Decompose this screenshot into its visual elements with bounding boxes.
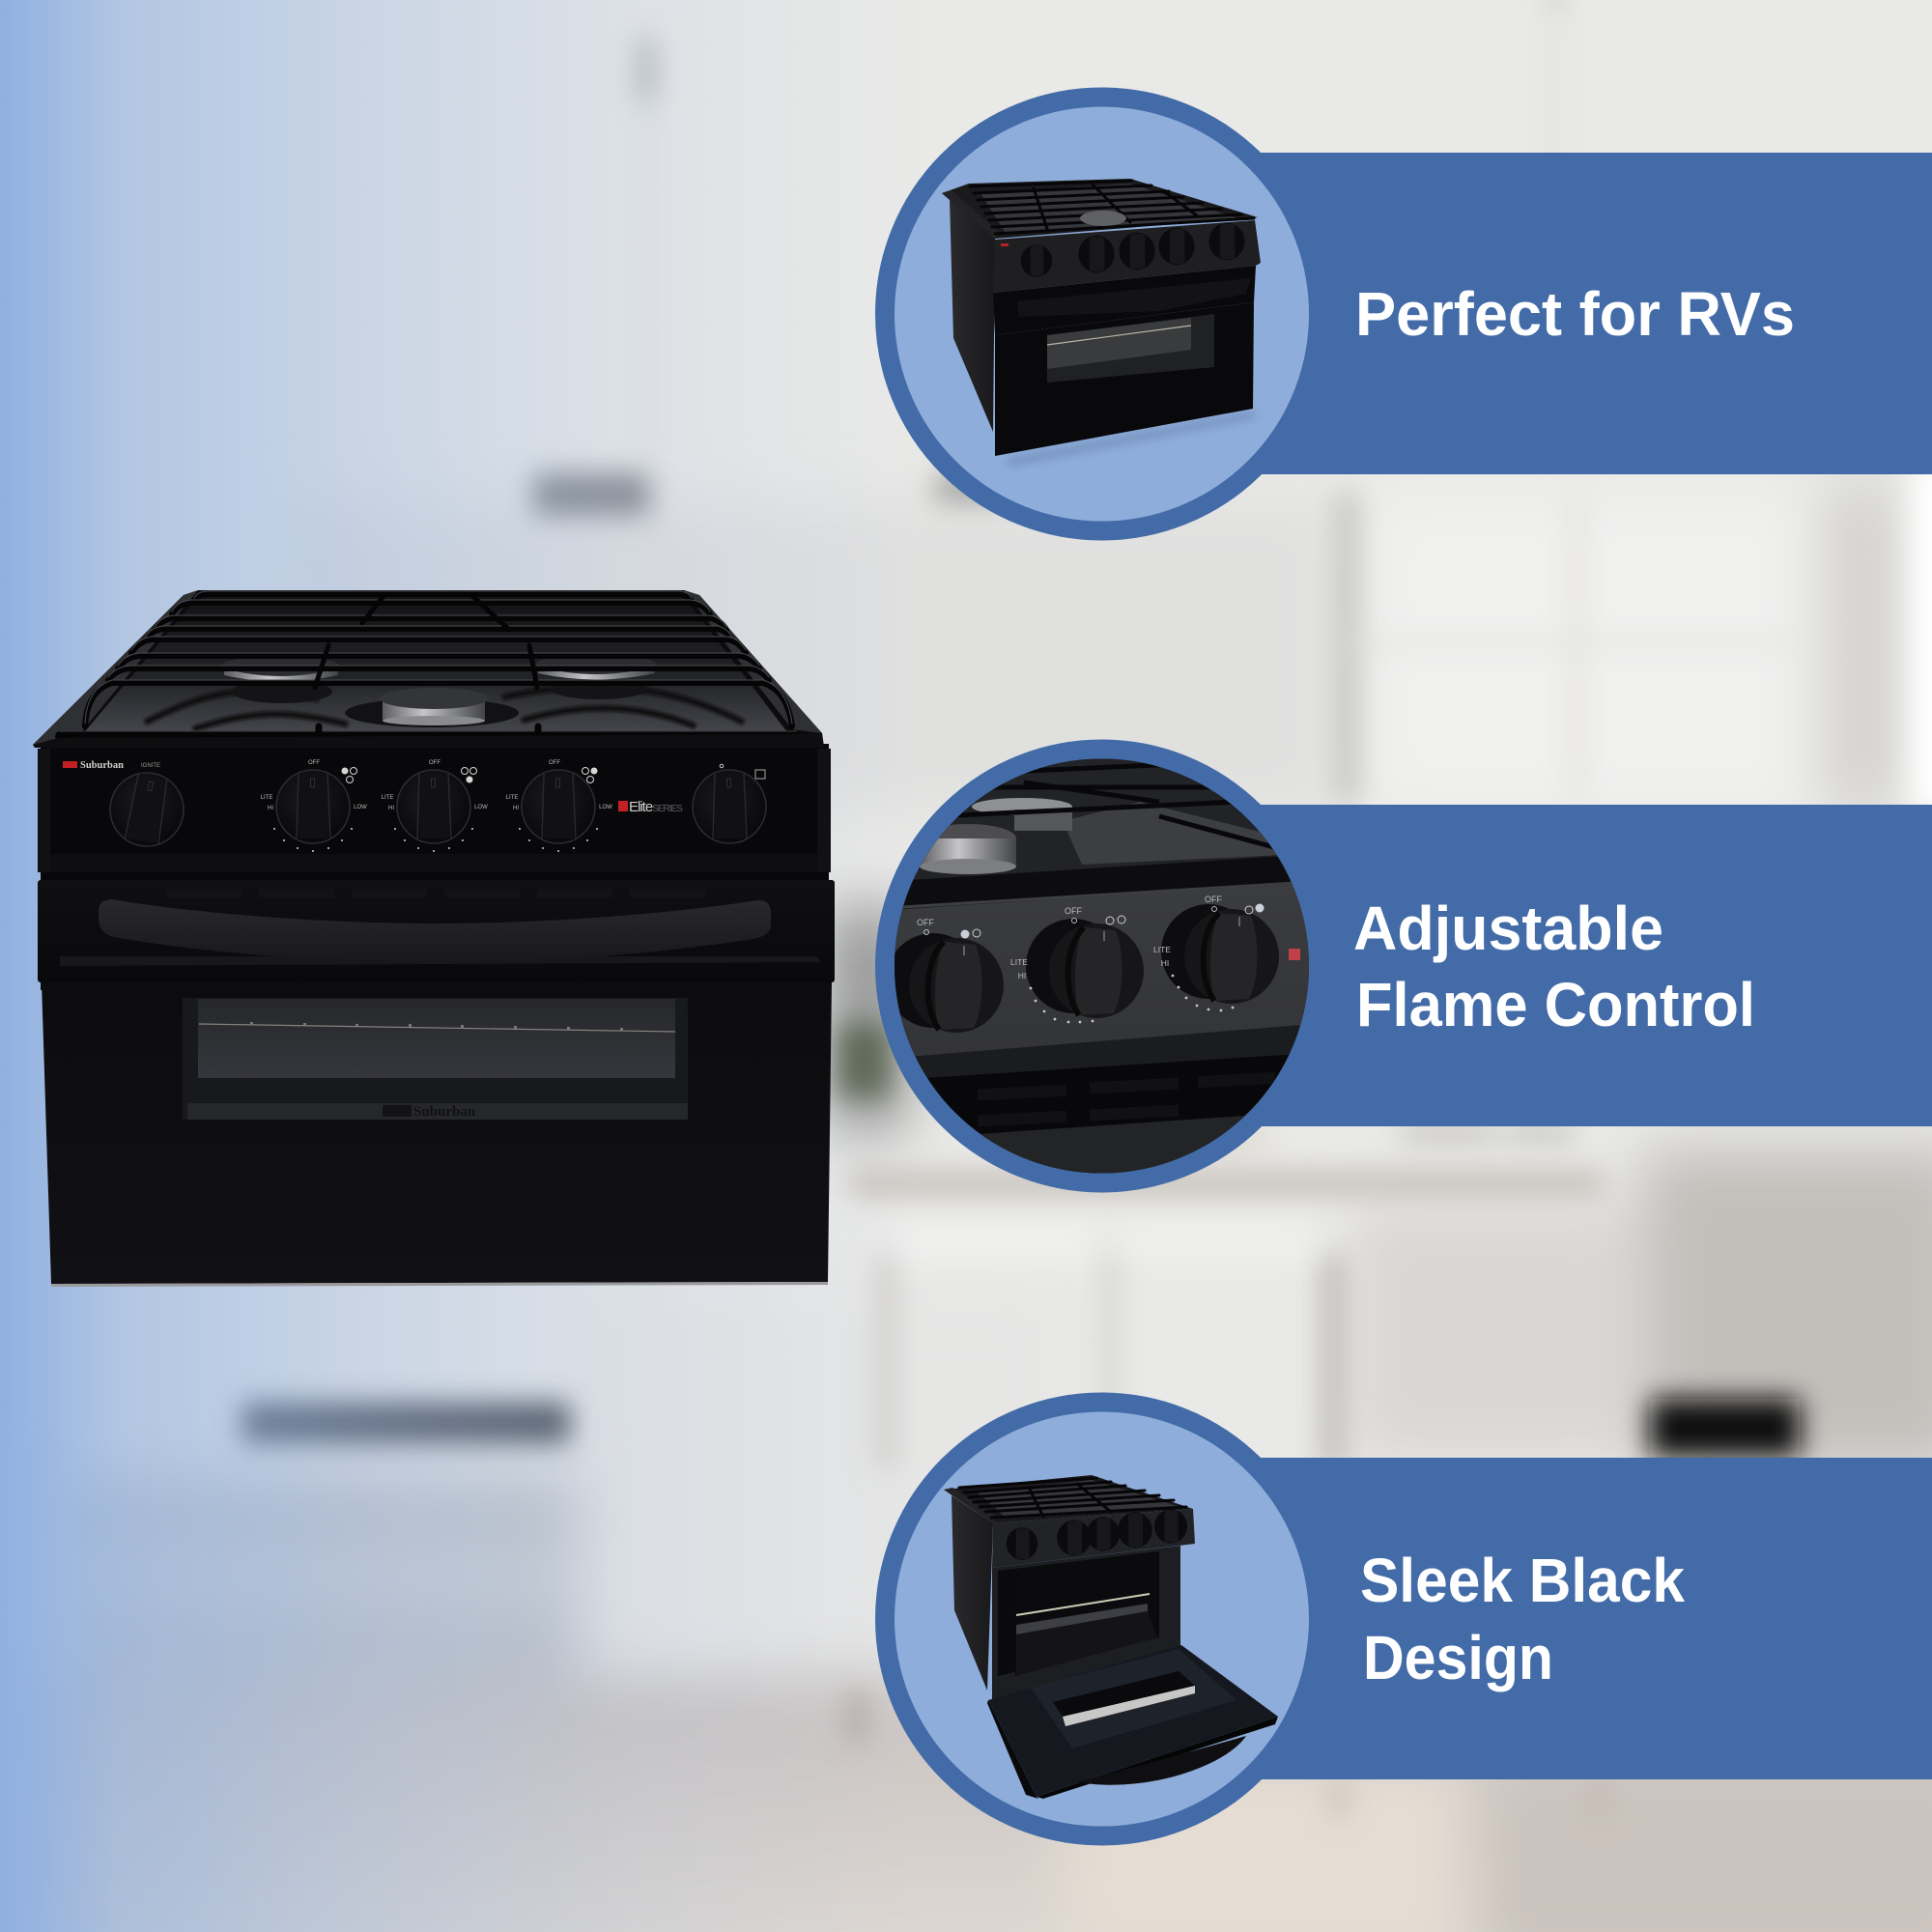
- body backing: [41, 744, 829, 990]
- control panel close-up photo: [895, 759, 1309, 1173]
- oven door handle: [99, 899, 771, 962]
- circle badge: [885, 750, 1319, 1182]
- oven knob: [693, 764, 766, 843]
- feature 3: Sleek Black Design: [885, 1403, 1932, 1835]
- burner dial: centre: [382, 760, 488, 852]
- handle band: [38, 880, 835, 982]
- feature text line 1: Sleek Black: [1360, 1546, 1685, 1615]
- knob: left: OFF: [917, 918, 934, 927]
- banner: [1246, 1458, 1932, 1779]
- burner dial: left: HI: [268, 806, 273, 811]
- brand: Elite Series: EliteSERIES: [629, 799, 683, 815]
- angled oven photo: [942, 179, 1261, 466]
- banner: [1246, 805, 1932, 1126]
- knob: right: HI: [1161, 958, 1169, 968]
- burner dial: right: [506, 760, 612, 852]
- burner dial: centre: HI: [388, 806, 394, 811]
- circle badge: [885, 97, 1319, 531]
- cooktop lip: [33, 733, 824, 748]
- main oven: black three-burner RV range: [33, 590, 835, 1287]
- knob: centre: HI: [1018, 971, 1026, 980]
- door window: [183, 998, 688, 1120]
- burner dial: centre: LOW: [474, 805, 488, 810]
- feature text line 2: Design: [1363, 1623, 1553, 1692]
- burner dial: centre: LITE: [382, 795, 393, 801]
- burner dial: left: OFF: [308, 760, 320, 766]
- burner dial: centre: OFF: [429, 760, 440, 766]
- banner: [1246, 153, 1932, 474]
- label: ignite: IGNITE: [141, 763, 160, 769]
- burner dial: right: HI: [513, 806, 519, 811]
- burner dial: left: [261, 760, 367, 852]
- feature text line 2: Flame Control: [1356, 970, 1755, 1039]
- oven door: [42, 982, 832, 1287]
- feature text: Perfect for RVs: [1355, 279, 1795, 349]
- feature text line 1: Adjustable: [1353, 894, 1663, 963]
- grates: [60, 591, 797, 738]
- burner dial: right: LITE: [506, 795, 518, 801]
- burner dial: right: LOW: [599, 805, 612, 810]
- burner dial: right: OFF: [549, 760, 560, 766]
- knob: centre: LITE: [1010, 957, 1028, 967]
- cooktop surface and side trim: [33, 590, 824, 747]
- knob: centre: [1010, 906, 1144, 1023]
- ignite knob: [104, 767, 189, 852]
- circle badge: [885, 1403, 1319, 1835]
- knob: centre: OFF: [1065, 906, 1082, 916]
- burner dial: left: LITE: [261, 795, 272, 801]
- burner dial: left: LOW: [354, 805, 367, 810]
- feature 1: Perfect for RVs: [885, 97, 1932, 531]
- feature 2: Adjustable Flame Control: [869, 734, 1932, 1198]
- label: Suburban: Suburban: [413, 1104, 476, 1120]
- knob: right: LITE: [1153, 945, 1171, 954]
- open oven door: [988, 1645, 1278, 1797]
- knob: left: [886, 918, 1004, 1033]
- control panel: [38, 749, 831, 872]
- knob: right: OFF: [1205, 895, 1222, 904]
- brand: Suburban: Suburban: [80, 760, 124, 771]
- knob: right: [1153, 895, 1279, 1011]
- open-door oven photo: [944, 1475, 1278, 1799]
- burners: [220, 654, 656, 727]
